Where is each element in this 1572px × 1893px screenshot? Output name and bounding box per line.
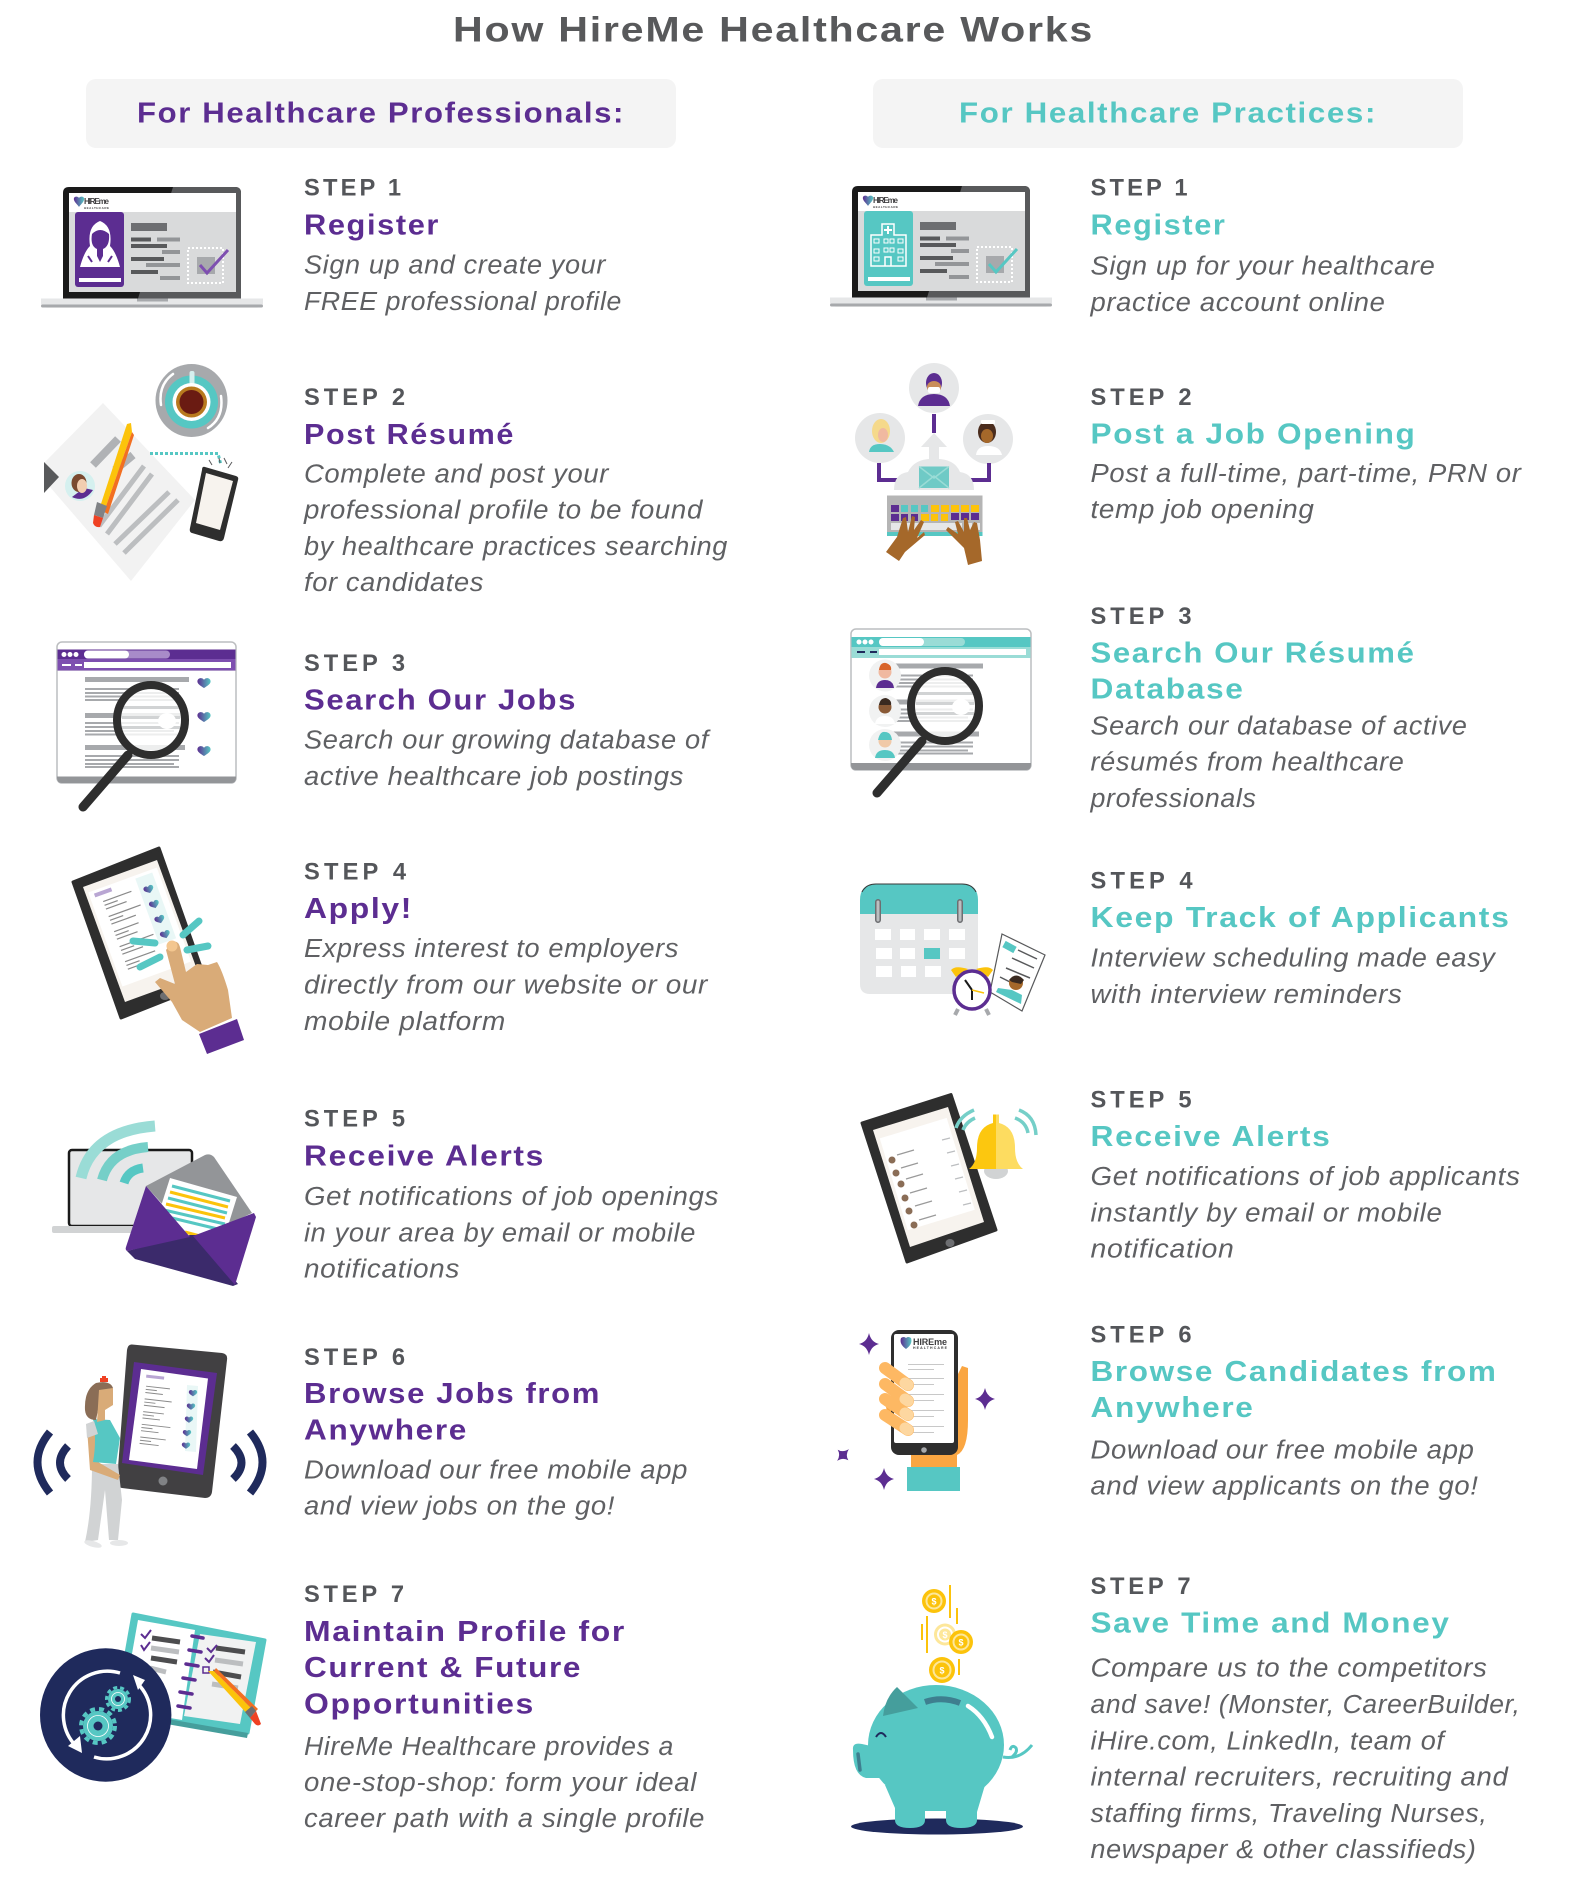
icon: gears and notebook checklist: [40, 1614, 265, 1782]
step 3 text: STEP 3: [1090, 604, 1192, 630]
step 1 text: [304, 176, 622, 316]
icon: hand holding phone with sparkles: HEALTHCARE: [913, 1346, 948, 1350]
step 2 text: [1090, 385, 1522, 524]
step 4 text: Keep Track of Applicants: [1090, 902, 1510, 934]
step 4 text: STEP 4: [1090, 868, 1193, 894]
icon: staff, cloud upload and keyboard: [855, 363, 1013, 565]
step 7 text: and save! (Monster, CareerBuilder,: [1090, 1691, 1520, 1719]
panel: for healthcare professionals: [38, 79, 728, 1833]
step 5 text: Get notifications of job applicants: [1090, 1163, 1520, 1191]
step 2 text: Complete and post your: [304, 460, 610, 488]
step 3 text: Database: [1090, 674, 1244, 706]
icon: laptop, wifi and envelope: [52, 1126, 256, 1286]
step 6 text: Browse Jobs from: [304, 1378, 601, 1410]
step 5: receive alerts: [862, 1088, 1520, 1264]
step 3 text: active healthcare job postings: [304, 763, 684, 791]
step 2 text: professional profile to be found: [303, 497, 703, 525]
step 4 text: [1090, 868, 1510, 1009]
step 5 text: [1090, 1088, 1520, 1264]
step 6 text: and view jobs on the go!: [304, 1492, 615, 1520]
step 3 text: Search Our Résumé: [1090, 638, 1416, 670]
step 4 text: mobile platform: [304, 1008, 506, 1036]
step 6 text: STEP 6: [304, 1345, 405, 1371]
icon: piggy bank with falling coins: [851, 1585, 1032, 1834]
step 3 text: professionals: [1089, 785, 1256, 813]
icon: piggy bank with falling coins: $: [931, 1596, 937, 1606]
panel: for healthcare practices: [830, 79, 1522, 1864]
heading: for healthcare professionals: For Healthcare Professionals:: [137, 98, 625, 130]
step 4: apply: [73, 848, 709, 1054]
step 3 text: [1089, 604, 1468, 813]
step 2 text: Post a full-time, part-time, PRN or: [1090, 460, 1522, 488]
step 5 text: Receive Alerts: [1090, 1121, 1332, 1153]
step 6: browse jobs from anywhere: [38, 1344, 688, 1549]
step 3: search our résumé database: [851, 604, 1468, 813]
step 7 text: [1090, 1574, 1520, 1864]
step 7 text: STEP 7: [304, 1582, 404, 1608]
step 5 text: notifications: [304, 1256, 460, 1284]
icon: hand holding phone with sparkles: HIREme: [913, 1337, 947, 1347]
step 3 text: Search Our Jobs: [304, 684, 577, 716]
step 7 text: STEP 7: [1090, 1574, 1190, 1600]
step 7 text: newspaper & other classifieds): [1090, 1836, 1476, 1864]
step 1 text: Register: [304, 210, 440, 242]
icon: laptop with hospital profile: [830, 186, 1052, 307]
step 6: browse candidates from anywhere: [832, 1322, 1498, 1500]
icon: tablet and notification bell: [862, 1094, 1036, 1262]
step 4 text: directly from our website or our: [304, 972, 709, 1000]
step 2 text: temp job opening: [1090, 496, 1314, 524]
icon: piggy bank with falling coins: $: [942, 1630, 948, 1640]
step 1 text: Sign up for your healthcare: [1090, 252, 1436, 280]
step 5 text: instantly by email or mobile: [1090, 1199, 1442, 1227]
step 2 text: by healthcare practices searching: [304, 533, 728, 561]
title: How HireMe Healthcare Works: [453, 10, 1094, 50]
step 2: post résumé: [44, 364, 728, 597]
icon: piggy bank with falling coins: $: [939, 1666, 945, 1676]
step 7 text: Save Time and Money: [1090, 1608, 1450, 1640]
step 6 text: [1090, 1322, 1498, 1500]
step 7: save time and money: [851, 1574, 1520, 1864]
step 5 text: STEP 5: [1090, 1088, 1192, 1114]
step 7 text: career path with a single profile: [304, 1805, 705, 1833]
step 1 text: STEP 1: [1090, 176, 1188, 202]
step 4 text: Express interest to employers: [304, 935, 679, 963]
step 7 text: one-stop-shop: form your ideal: [304, 1769, 698, 1797]
step 7 text: Compare us to the competitors: [1090, 1655, 1488, 1683]
step 5 text: STEP 5: [304, 1107, 405, 1133]
step 7 text: HireMe Healthcare provides a: [304, 1733, 674, 1761]
step 2 text: [303, 385, 728, 597]
step 5 text: Get notifications of job openings: [304, 1183, 719, 1211]
step 4 text: with interview reminders: [1090, 981, 1402, 1009]
step 4 text: STEP 4: [304, 860, 407, 886]
step 2 text: STEP 2: [1090, 385, 1192, 411]
step 5: receive alerts: [52, 1107, 719, 1286]
step 6 text: Browse Candidates from: [1090, 1356, 1498, 1388]
step 2 text: for candidates: [304, 569, 484, 597]
step 5 text: in your area by email or mobile: [304, 1219, 696, 1247]
step 6 text: Anywhere: [1090, 1392, 1254, 1424]
step 3 text: [304, 651, 711, 791]
step 6 text: Download our free mobile app: [1090, 1436, 1474, 1464]
step 2 text: Post Résumé: [304, 419, 515, 451]
step 4: keep track of applicants: [860, 868, 1510, 1015]
step 3 text: STEP 3: [304, 651, 405, 677]
heading: for healthcare professionals: [86, 79, 676, 148]
step 1 text: STEP 1: [304, 176, 401, 202]
step 7 text: [304, 1582, 705, 1833]
step 1: register: [830, 176, 1436, 317]
step 7 text: Maintain Profile for: [304, 1616, 626, 1648]
step 1 text: Sign up and create your: [304, 252, 607, 280]
step 1 text: FREE professional profile: [304, 288, 622, 316]
icon: browser with magnifying glass: [57, 642, 236, 807]
step 3: search our jobs: [57, 642, 711, 807]
icon: laptop with professional profile: [41, 187, 263, 308]
step 5 text: notification: [1090, 1236, 1234, 1264]
step 6 text: STEP 6: [1090, 1322, 1192, 1348]
step 7 text: staffing firms, Traveling Nurses,: [1090, 1800, 1488, 1828]
step 1 text: practice account online: [1089, 289, 1386, 317]
step 3 text: Search our growing database of: [304, 726, 711, 754]
icon: tablet with tapping hand: [73, 848, 244, 1054]
icon: browser of candidates with magnifying glass: [851, 629, 1031, 793]
step 4 text: [304, 860, 709, 1036]
step 1: register: [41, 176, 622, 316]
step 2: post a job opening: [855, 363, 1522, 565]
heading: for healthcare practices: For Healthcare Practices:: [959, 98, 1377, 130]
icon: hand holding phone with sparkles: [832, 1330, 995, 1491]
step 1 text: [1089, 176, 1436, 317]
step 6 text: and view applicants on the go!: [1090, 1472, 1478, 1500]
step 7 text: Opportunities: [304, 1688, 535, 1720]
step 2 text: Post a Job Opening: [1090, 418, 1416, 450]
step 6 text: Anywhere: [304, 1414, 468, 1446]
icon: piggy bank with falling coins: $: [958, 1638, 964, 1648]
step 3 text: résumés from healthcare: [1090, 749, 1404, 777]
heading: for healthcare practices: [873, 79, 1463, 148]
step 3 text: Search our database of active: [1090, 712, 1468, 740]
step 4 text: Interview scheduling made easy: [1090, 945, 1497, 973]
step 6 text: Download our free mobile app: [304, 1456, 688, 1484]
icon: nurse with tablet and signal waves: [38, 1344, 262, 1549]
step 5 text: Receive Alerts: [304, 1141, 545, 1173]
step 7 text: iHire.com, LinkedIn, team of: [1090, 1727, 1447, 1755]
step 1 text: Register: [1090, 210, 1226, 242]
step 6 text: [304, 1345, 688, 1520]
step 4 text: Apply!: [304, 893, 413, 925]
step 2 text: STEP 2: [304, 385, 405, 411]
step 7 text: internal recruiters, recruiting and: [1090, 1764, 1509, 1792]
step 5 text: [304, 1107, 719, 1284]
step 7: maintain profile: [40, 1582, 705, 1833]
step 7 text: Current & Future: [304, 1652, 582, 1684]
icon: résumé, pencil, coffee and phone: [44, 364, 238, 581]
icon: calendar, clock and résumé: [860, 884, 1045, 1015]
